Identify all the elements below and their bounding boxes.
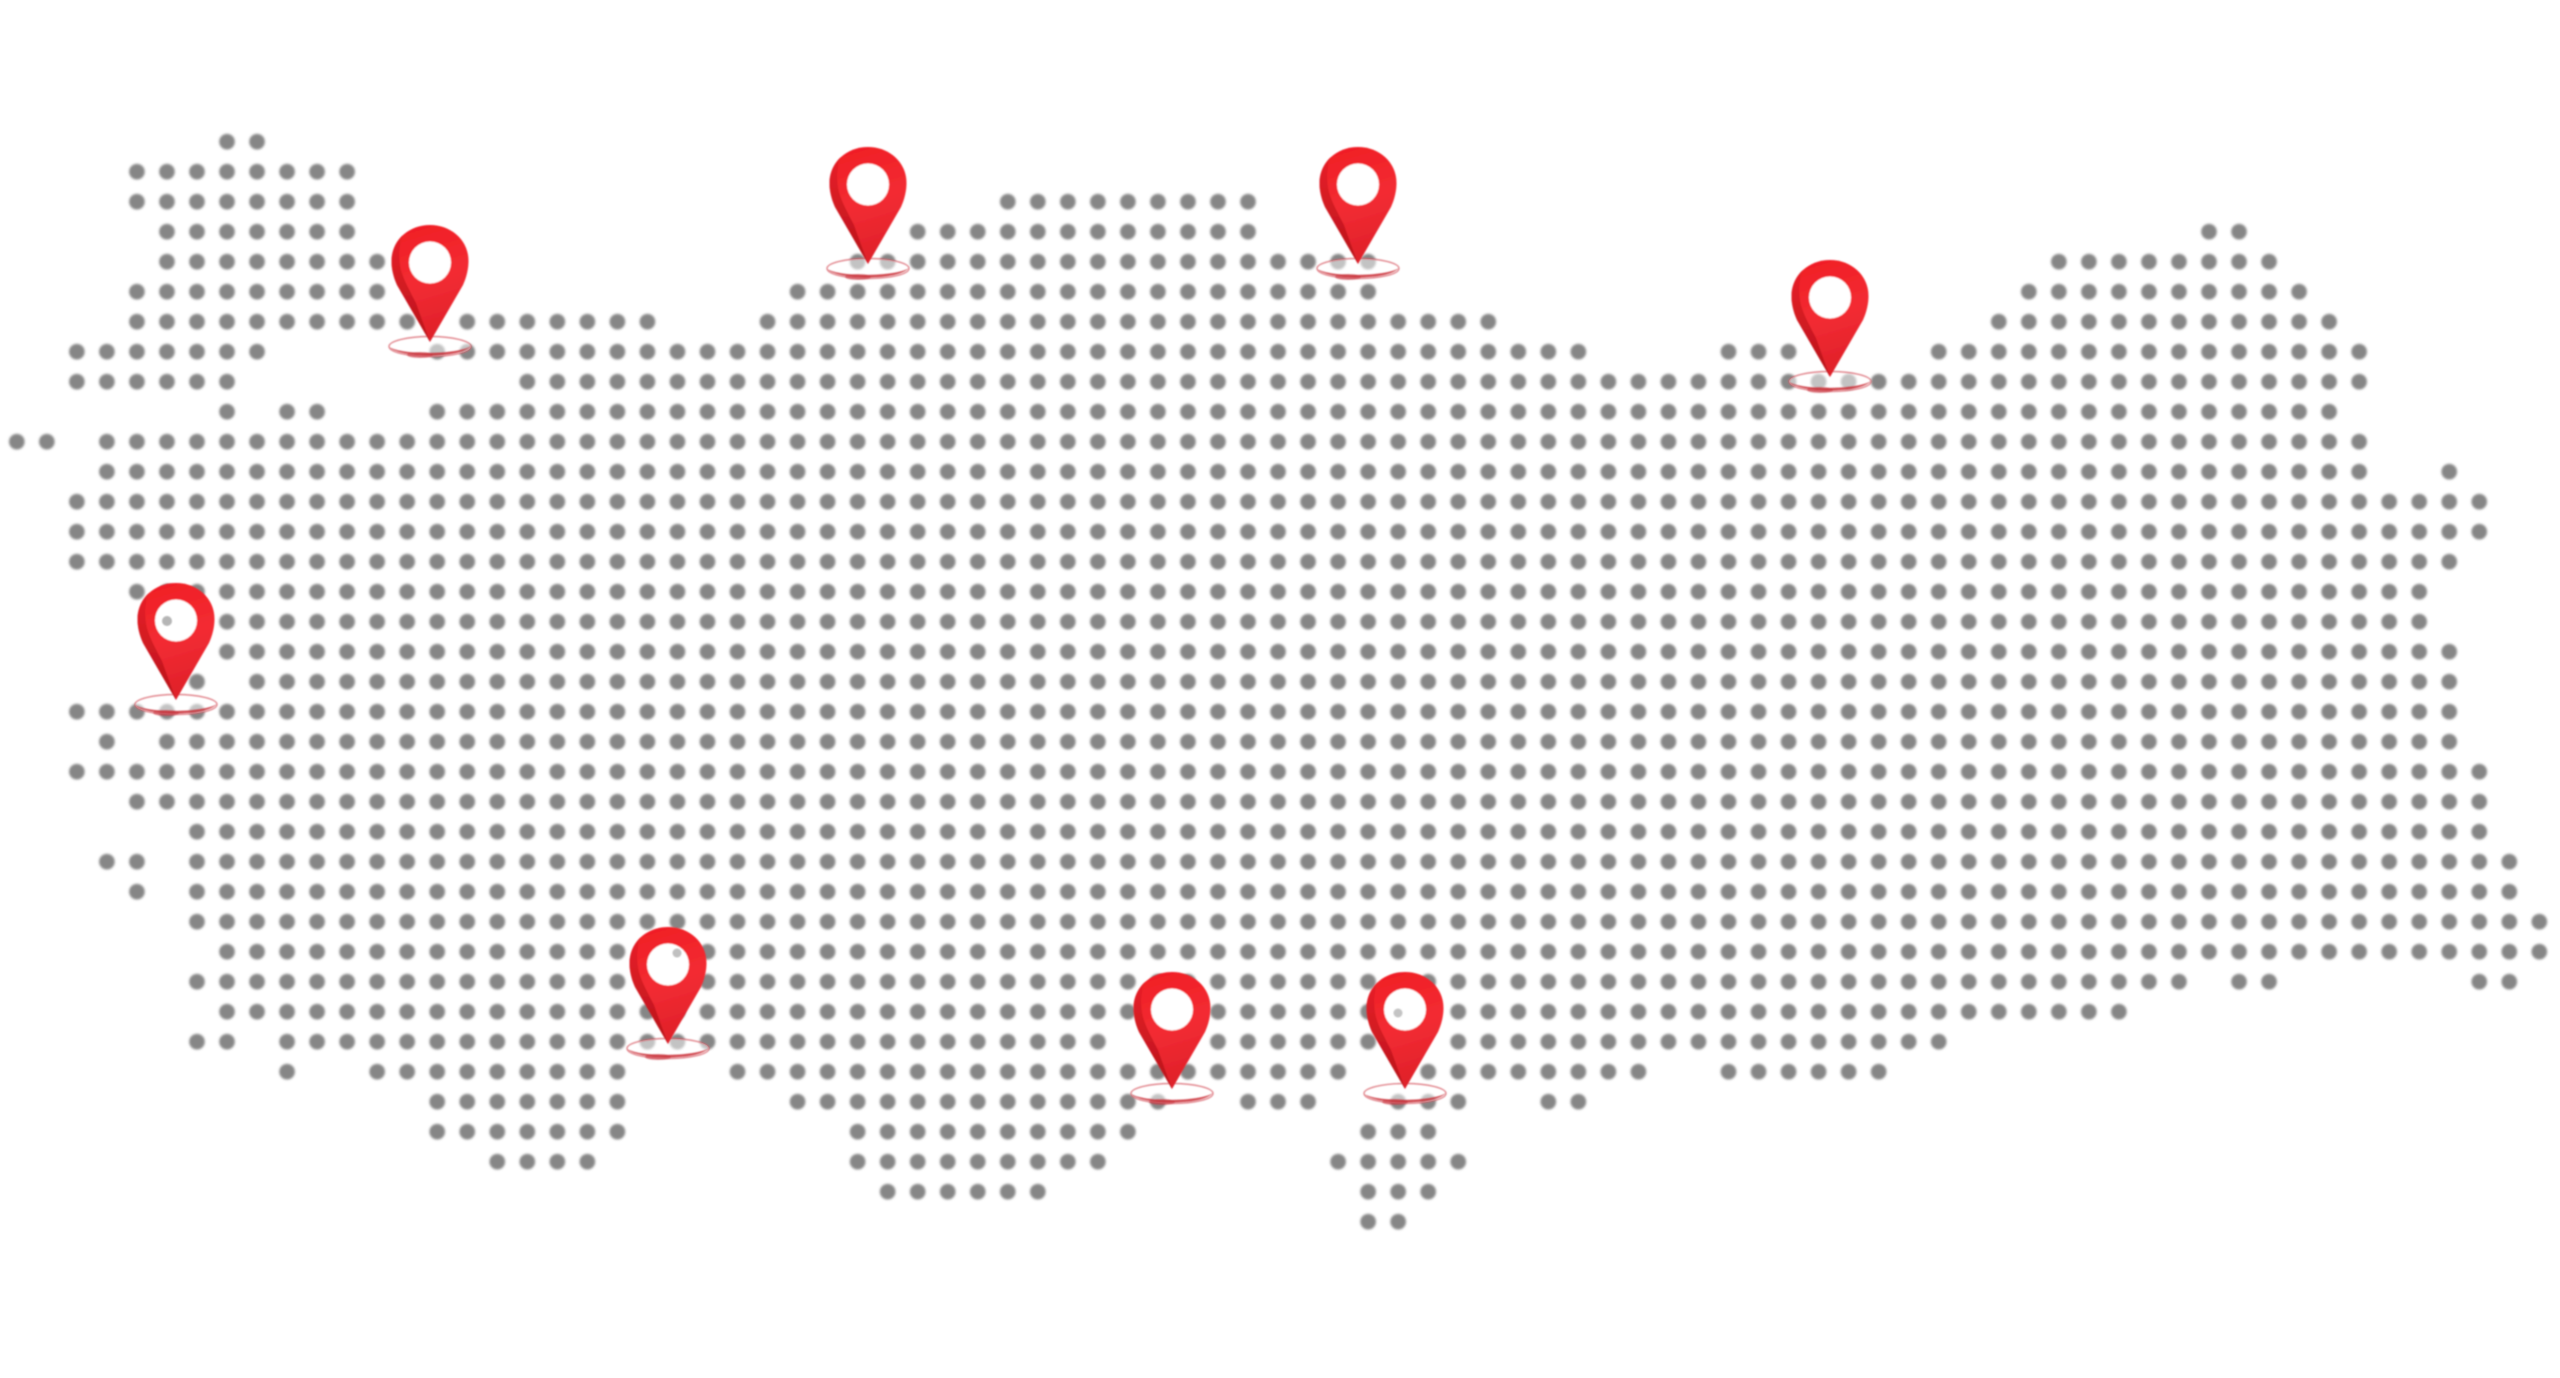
pin: north-east — [1789, 260, 1871, 393]
pin: west — [135, 583, 217, 716]
pin: north centre-right — [1317, 147, 1399, 280]
pin: south-east — [1364, 972, 1446, 1105]
pin: south centre — [1131, 972, 1213, 1105]
dotted map — [17, 142, 2540, 1222]
pin: north-west — [389, 225, 471, 358]
pin: south-west — [627, 927, 709, 1060]
pin: north centre-left — [827, 147, 909, 280]
